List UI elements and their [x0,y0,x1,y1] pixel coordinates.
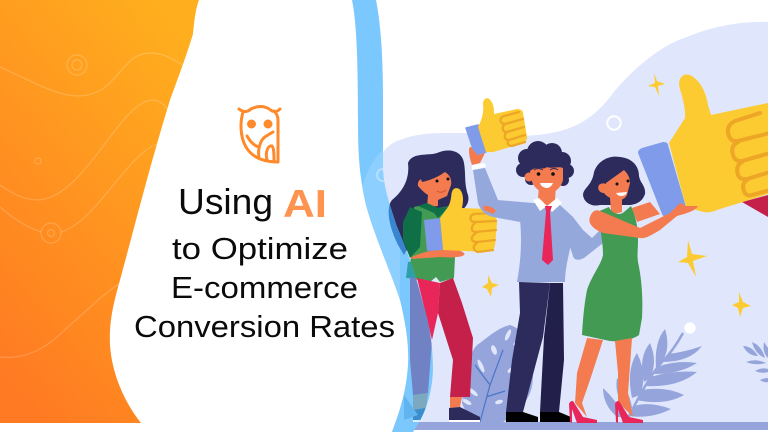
sparkle small top [648,73,665,96]
orange panel with waves [0,0,199,423]
face [530,167,563,193]
sparkle lower middle [482,275,499,297]
right edge frond [743,342,768,382]
frond seen through ribbon [404,395,418,420]
icon: owl logo [239,106,280,162]
trousers [417,278,440,340]
title line: to Optimize: to Optimize [172,231,348,266]
title line: Using AI: AI [283,183,327,226]
tie [542,206,553,265]
title line: Using AI: Using [178,181,273,222]
ground bar [413,422,768,430]
shirt torso [408,204,456,282]
hair fringe [420,168,447,182]
blue ribbon [352,0,433,432]
thumbs-up fingers [470,213,496,252]
torso [517,203,573,282]
dot [684,322,696,334]
trousers back [540,283,564,412]
ribbon overlap tints [362,140,432,422]
big thumb cuff [638,142,686,217]
trousers front [506,282,550,412]
ankle [450,397,462,408]
left arm behind woman [566,217,603,260]
raised hand [469,147,485,165]
front arm [589,203,698,238]
smile [540,183,553,188]
title [134,181,395,344]
hair [583,157,645,206]
ring [607,116,621,130]
smile [616,192,627,196]
neck [538,186,556,207]
big thumb hand [669,74,768,212]
raised arm [473,168,533,222]
palm frond [603,329,702,418]
face [418,172,451,207]
heels [569,401,643,423]
shoes [506,412,571,422]
ring under ribbon [376,168,384,182]
woman left [389,150,497,422]
legs [575,338,633,417]
hair [389,150,468,255]
lavender background blob [366,22,768,423]
monstera leaf [462,325,533,422]
dress [582,206,642,341]
raised thumbs-up held by man [466,98,527,155]
cuff [472,163,486,170]
thumbs-up hand [440,188,497,252]
hair [516,141,574,186]
forearm and hand [410,248,465,259]
sole [449,420,480,422]
hair seen through ribbon [388,204,406,255]
shoe [449,407,480,420]
leg seen through ribbon [410,277,432,395]
face [598,170,630,200]
sparkle large [678,240,707,277]
decorative sparkles and circles [482,73,751,334]
collar [533,198,562,212]
big thumb fingers [728,113,768,196]
sparkle right [732,292,751,317]
neck [610,198,622,214]
ankle seen through ribbon [413,393,428,410]
back arm [632,202,660,222]
shoe seen through ribbon [413,408,426,420]
woman right [569,74,768,423]
title line: Conversion Rates: Conversion Rates [134,309,395,344]
hand on thumb [483,206,496,214]
thumbs-up cuff [424,218,443,251]
dark sleeve [403,207,422,258]
shirt seen through ribbon [403,207,422,258]
title line: E-commerce: E-commerce [171,270,358,305]
red sleeve corner [742,195,768,217]
man [469,141,603,422]
title line: Using AI [178,181,327,226]
collar [418,203,448,218]
